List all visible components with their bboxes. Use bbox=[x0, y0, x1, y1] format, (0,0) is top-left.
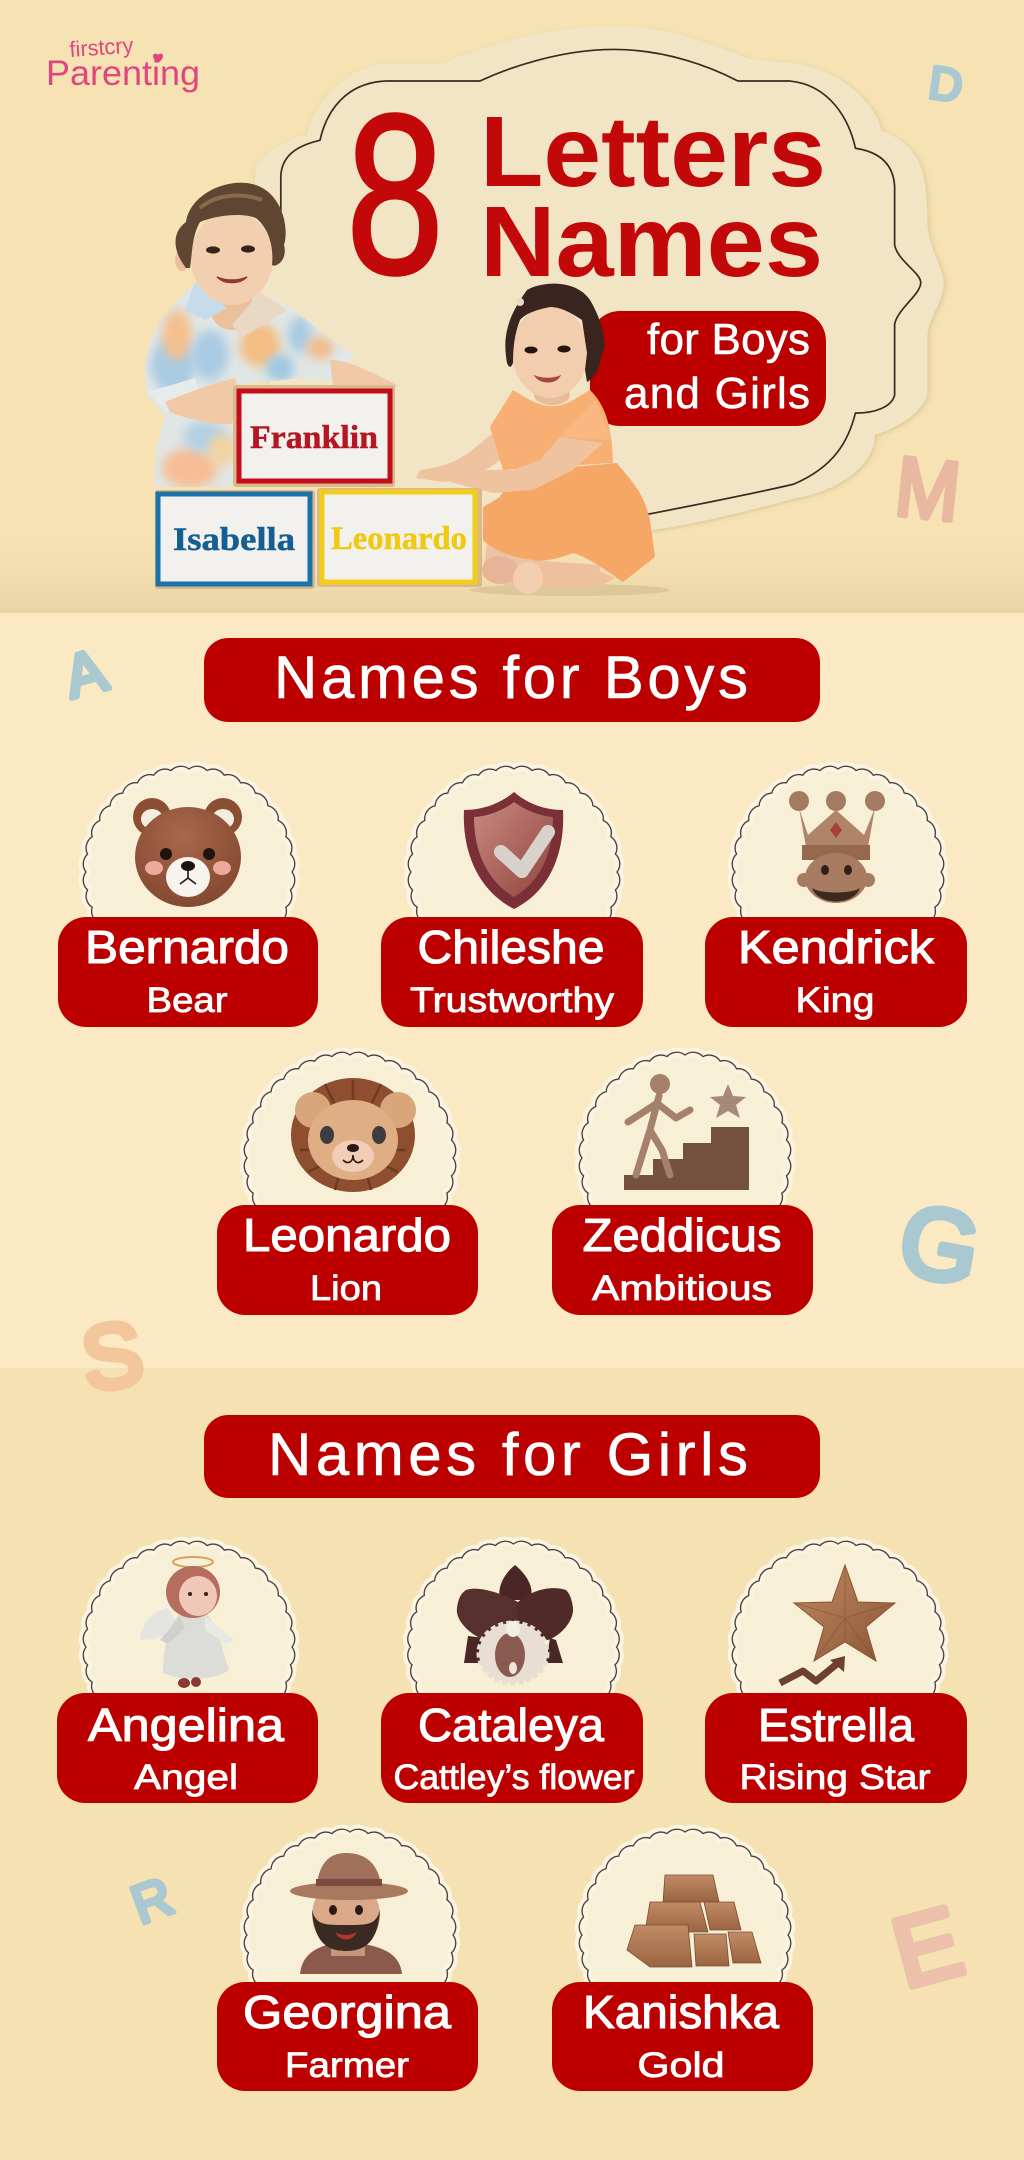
card: Kanishka bbox=[552, 1829, 813, 2091]
title: Letters bbox=[480, 96, 826, 208]
photo: baby girl bbox=[416, 284, 670, 596]
card: Georgina bbox=[217, 1829, 478, 2091]
card: Zeddicus: Zeddicus bbox=[582, 1209, 782, 1261]
subtitle pill bbox=[590, 311, 826, 426]
block: Franklin bbox=[233, 385, 395, 487]
card: Cataleya: Cattley’s flower bbox=[394, 1758, 635, 1797]
heading: Names for Boys: Names for Boys bbox=[274, 644, 748, 711]
block: Franklin: Franklin bbox=[250, 420, 378, 456]
icon: shield with check bbox=[464, 792, 563, 909]
card: Zeddicus: Ambitious bbox=[592, 1269, 772, 1308]
icon: angel bbox=[140, 1557, 234, 1688]
photo: baby boy bbox=[145, 183, 397, 488]
block: Isabella: Isabella bbox=[173, 522, 295, 558]
block: Isabella bbox=[155, 490, 315, 589]
title bbox=[346, 68, 826, 322]
icon: lion bbox=[291, 1078, 416, 1192]
card: Angelina bbox=[57, 1541, 318, 1803]
card: Bernardo: Bernardo bbox=[85, 921, 289, 973]
title: Names bbox=[480, 186, 823, 298]
logo bbox=[46, 33, 200, 93]
decorative letter D: D bbox=[926, 56, 966, 112]
card: Chileshe: Trustworthy bbox=[410, 981, 615, 1020]
plaque behind title bbox=[255, 26, 944, 532]
icon: crowned king bbox=[789, 791, 885, 903]
card: Angelina: Angel bbox=[134, 1758, 238, 1797]
card: Leonardo: Lion bbox=[310, 1269, 382, 1308]
decorative letter S: S bbox=[76, 1303, 149, 1411]
icon: star with rising arrow bbox=[780, 1565, 895, 1683]
subtitle pill: for Boys bbox=[647, 315, 810, 364]
card: Bernardo bbox=[58, 766, 318, 1027]
card: Estrella: Estrella bbox=[758, 1699, 914, 1751]
decorative letter A: A bbox=[57, 636, 113, 711]
card: Kendrick bbox=[705, 766, 967, 1027]
card: Kendrick: Kendrick bbox=[738, 921, 935, 973]
card: Georgina: Farmer bbox=[285, 2046, 409, 2085]
card: Estrella: Rising Star bbox=[740, 1758, 931, 1797]
card: Kanishka: Gold bbox=[638, 2046, 724, 2085]
subtitle pill: and Girls bbox=[624, 369, 810, 418]
icon: farmer bbox=[290, 1853, 408, 1974]
floor shading bbox=[0, 520, 1024, 613]
heading: Names for Boys bbox=[204, 638, 820, 722]
card: Chileshe bbox=[381, 766, 643, 1027]
background: top band bbox=[0, 0, 1024, 613]
decorative letter M: M bbox=[891, 439, 965, 539]
card: Zeddicus bbox=[552, 1052, 813, 1315]
icon: climbing stairs to star bbox=[624, 1074, 749, 1190]
block: Leonardo: Leonardo bbox=[331, 521, 467, 557]
card: Estrella bbox=[705, 1541, 967, 1803]
background: girls section bbox=[0, 1368, 1024, 2160]
decorative letter E: E bbox=[881, 1885, 973, 2009]
icon: gold bars bbox=[627, 1875, 761, 1967]
card: Leonardo bbox=[217, 1052, 478, 1315]
card: Angelina: Angelina bbox=[88, 1699, 284, 1751]
card: Cataleya bbox=[381, 1541, 643, 1803]
card: Kendrick: King bbox=[796, 981, 874, 1020]
block: Leonardo bbox=[317, 488, 482, 587]
card: Chileshe: Chileshe bbox=[418, 921, 604, 973]
logo: firstcry bbox=[69, 33, 134, 62]
card: Leonardo: Leonardo bbox=[243, 1209, 451, 1261]
card: Bernardo: Bear bbox=[146, 981, 228, 1020]
icon: orchid flower bbox=[457, 1565, 573, 1683]
logo: Parenting bbox=[46, 54, 200, 93]
decorative letter G: G bbox=[892, 1183, 988, 1307]
heading: Names for Girls bbox=[204, 1415, 820, 1498]
card: Georgina: Georgina bbox=[243, 1986, 451, 2038]
card: Cataleya: Cataleya bbox=[418, 1699, 604, 1751]
icon: bear bbox=[133, 798, 242, 907]
title: 8 bbox=[346, 68, 444, 322]
decorative letter R: R bbox=[124, 1866, 181, 1936]
heading: Names for Girls: Names for Girls bbox=[268, 1421, 748, 1488]
card: Kanishka: Kanishka bbox=[583, 1986, 779, 2038]
background: boys section bbox=[0, 613, 1024, 1368]
